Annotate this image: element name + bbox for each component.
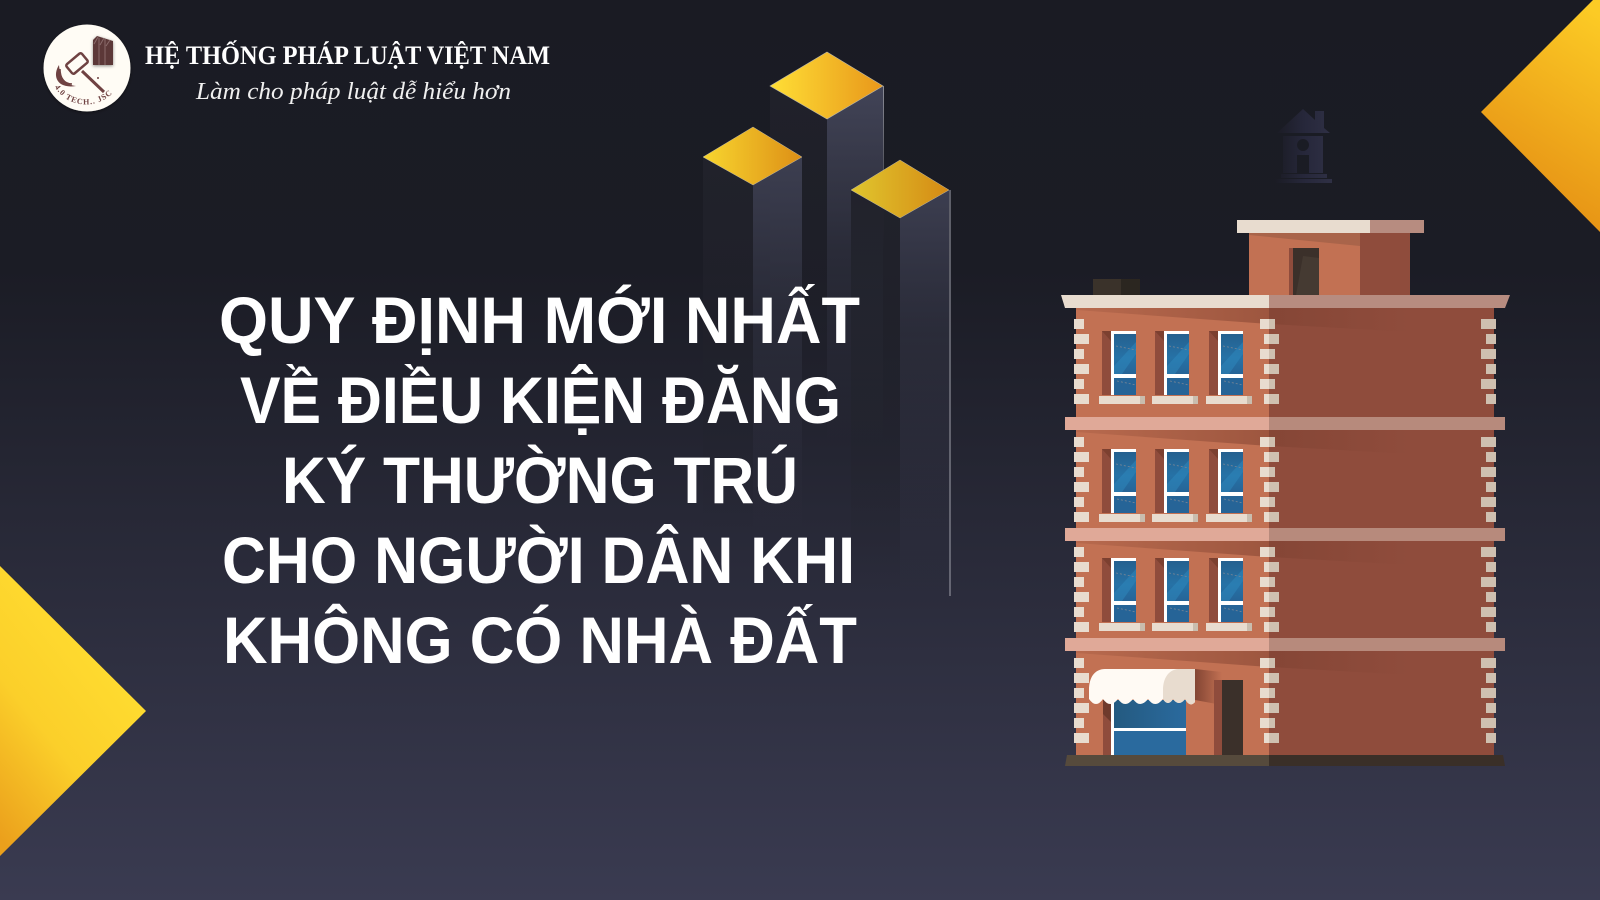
wall shadows [1076,308,1410,675]
tower: right [851,160,950,596]
corner bricks [1074,319,1496,743]
title: CHO NGƯỜI DÂN KHI [222,523,855,597]
brand name: HỆ THỐNG PHÁP LUẬT VIỆT NAM [145,41,550,70]
brand tagline: Làm cho pháp luật dễ hiểu hơn [195,79,511,105]
rooftop chimney box [1093,279,1140,295]
ground floor shop window [1103,700,1186,755]
shop awning [1089,669,1195,704]
ground floor door [1195,669,1243,755]
logo badge: 4.0 TECH.. JSC [56,86,112,104]
roof cornice [1061,295,1510,308]
title [219,283,860,677]
logo badge [44,24,130,112]
building walls [1076,308,1494,755]
floor ledges [1065,417,1505,651]
title: VỀ ĐIỀU KIỆN ĐĂNG [240,363,841,437]
illustration: brick apartment building [1061,220,1510,766]
upper floor windows [1099,331,1252,631]
logo and brand header [44,24,550,112]
title: KÝ THƯỜNG TRÚ [282,443,798,517]
tower: left [703,127,802,530]
tower: tall centre [770,52,884,440]
icon: ghost house [1275,109,1332,183]
decorative corner: bottom left yellow diamond [0,566,146,856]
rooftop penthouse [1237,220,1424,295]
decorative corner: top right yellow diamond [1481,0,1600,232]
building base [1065,755,1505,766]
isometric towers [703,52,950,596]
title: QUY ĐỊNH MỚI NHẤT [219,283,860,357]
title: KHÔNG CÓ NHÀ ĐẤT [223,603,857,677]
